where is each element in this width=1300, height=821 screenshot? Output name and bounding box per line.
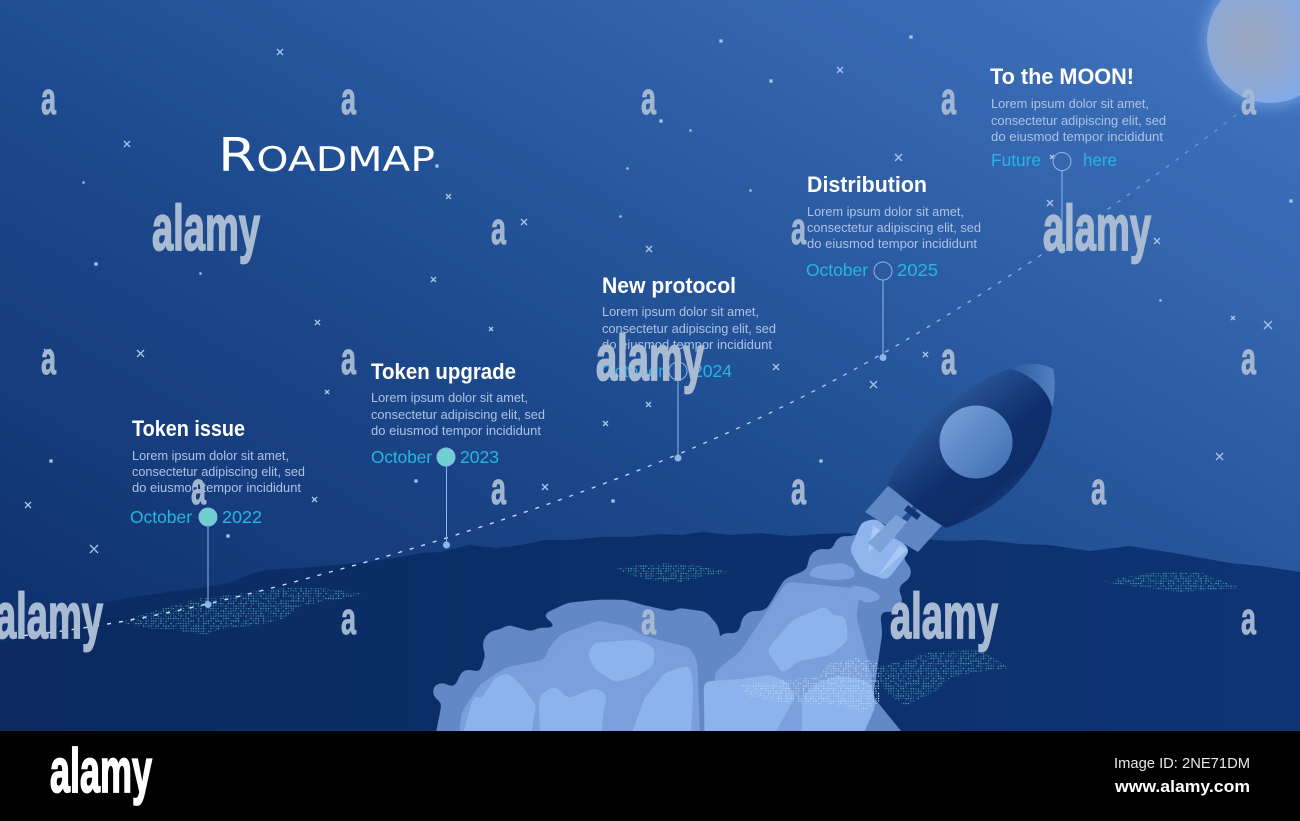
marker [199,508,217,608]
date: 2024 [693,361,732,381]
stock watermarks: a [1241,333,1257,384]
image id: Image ID: 2NE71DM [1114,755,1250,772]
stock watermarks: a [941,333,957,384]
stock watermarks: a [791,463,807,514]
description: Lorem ipsum dolor sit amet, [991,96,1149,111]
milestone: New protocol [601,273,776,461]
heading: New protocol [602,273,736,298]
date: here [1083,150,1117,170]
rocket: window [940,406,1012,478]
stock watermarks: alamy [1043,192,1151,264]
smoke: right cloud middle layer [715,582,873,745]
date [601,361,732,381]
stock watermarks: a [791,203,807,254]
stock watermarks: a [41,333,57,384]
description: consectetur adipiscing elit, sed [602,321,776,336]
heading: To the MOON! [990,64,1134,89]
description [807,204,981,251]
stock watermarks: a [1241,593,1257,644]
milestone: Token issue [130,416,305,608]
milestone: Token upgrade [371,359,545,548]
smoke: left cloud light puffs [460,640,693,745]
marker [874,262,892,360]
stock watermarks: a [1241,73,1257,124]
stock watermarks: a [491,203,507,254]
description: consectetur adipiscing elit, sed [371,407,545,422]
footer bar [0,731,1300,821]
smoke: right cloud back layer [700,530,912,745]
stock watermarks: a [491,463,507,514]
stock watermarks: a [641,593,657,644]
description [602,304,776,352]
moon [1203,0,1300,107]
rocket: body [887,369,1052,528]
dotted haze over smoke [740,658,880,712]
stock watermarks: alamy [890,580,998,652]
date: 2022 [222,507,262,527]
description: consectetur adipiscing elit, sed [132,464,305,479]
description: do eiusmod tempor incididunt [371,423,541,438]
description: do eiusmod tempor incididunt [991,129,1163,144]
stock watermarks: a [191,463,207,514]
milestone: Distribution [806,172,981,360]
description: do eiusmod tempor incididunt [132,480,301,495]
route: dashed trajectory [0,112,1240,638]
date: Future [991,150,1041,170]
smoke plume [432,519,912,745]
marker [669,362,687,461]
smoke: exhaust streak [868,526,907,576]
description: do eiusmod tempor incididunt [807,236,977,251]
stock watermarks: alamy [152,192,260,264]
title: ROADMAP [218,128,435,182]
date [991,150,1117,170]
date: October [601,361,664,381]
smoke: left cloud middle layer [458,621,700,745]
milestone: To the MOON [990,64,1166,253]
site url: www.alamy.com [1114,778,1250,796]
description [371,390,545,438]
stock watermarks: a [341,73,357,124]
stock watermarks: alamy [0,580,103,652]
rocket: nose cap [1010,364,1055,408]
marker [437,448,455,548]
rocket [865,364,1055,553]
smoke: top puffs [805,563,885,603]
rocket: nozzles [865,486,944,553]
date [806,260,938,280]
description [132,448,305,495]
date: October [371,447,432,467]
description: Lorem ipsum dolor sit amet, [602,304,759,319]
description [991,96,1166,144]
description: Lorem ipsum dolor sit amet, [371,390,528,405]
stock watermarks: a [941,73,957,124]
footer logo: alamy [50,737,152,806]
date: 2023 [460,447,499,467]
planet ground [0,532,1300,731]
date: 2025 [897,260,938,280]
description: consectetur adipiscing elit, sed [991,113,1166,128]
description: Lorem ipsum dolor sit amet, [807,204,964,219]
description: do eiusmod tempor incididunt [602,337,772,352]
description: consectetur adipiscing elit, sed [807,220,981,235]
marker [1053,152,1071,253]
stock watermarks: a [341,333,357,384]
date [371,447,499,467]
stock watermarks: a [341,593,357,644]
stock watermarks: a [1091,463,1107,514]
heading: Distribution [807,172,927,197]
textured land patches [120,563,1242,706]
date: October [130,507,192,527]
description: Lorem ipsum dolor sit amet, [132,448,289,463]
smoke: exhaust jet [850,519,910,580]
stock watermarks [0,73,1257,652]
heading: Token upgrade [371,359,516,384]
date [130,507,262,527]
heading: Token issue [132,416,245,441]
smoke: left cloud back layer [432,600,722,745]
stars [25,36,1292,553]
stock watermarks: a [641,73,657,124]
date: October [806,260,868,280]
stock watermarks: a [41,73,57,124]
smoke: right cloud light puffs [704,606,875,745]
stock watermarks: alamy [596,322,704,394]
